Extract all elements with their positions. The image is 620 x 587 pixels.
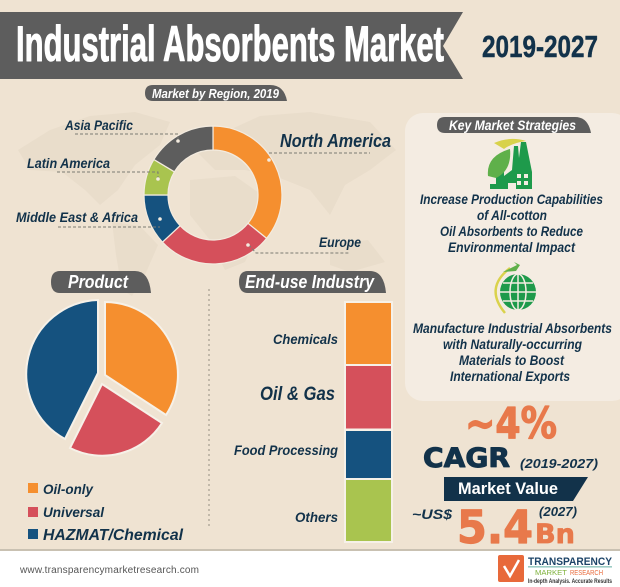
stat: market value xyxy=(412,501,577,554)
stat: market value: 5.4 xyxy=(457,501,533,554)
text: strategy two: Materials to Boost xyxy=(459,353,564,368)
pill heading: key market strategies: Key Market Strategies xyxy=(449,118,576,133)
legend: product xyxy=(28,481,184,544)
label: Europe: Europe xyxy=(319,235,361,250)
segment: Chemicals xyxy=(346,303,391,364)
segment: Others xyxy=(346,480,391,541)
stat: market value: (2027) xyxy=(539,504,577,519)
legend: product: Universal xyxy=(43,504,105,520)
segment: Oil and Gas xyxy=(346,366,391,428)
title banner xyxy=(0,12,463,79)
footer url: www.transparencymarketresearch.com xyxy=(19,565,199,576)
pill heading: market by region: Market by Region, 2019 xyxy=(152,86,280,101)
banner: market value: Market Value xyxy=(458,480,558,498)
logo: MARKET xyxy=(535,568,567,577)
pie chart: product xyxy=(26,300,178,456)
stat: CAGR label: CAGR xyxy=(423,443,510,474)
slice: Universal xyxy=(70,384,162,456)
bar labels: Oil & Gas xyxy=(260,384,335,405)
stat: market value: Bn xyxy=(535,519,575,550)
stacked bar: end-use industry xyxy=(344,301,393,543)
logo: TRANSPARENCY xyxy=(528,556,613,568)
bar labels: Chemicals xyxy=(273,331,338,347)
segment: North America xyxy=(213,126,282,238)
logo xyxy=(498,555,613,585)
donut markers xyxy=(156,139,271,247)
stat: CAGR percentage: ~4% xyxy=(465,399,557,449)
logo: RESEARCH xyxy=(570,568,603,577)
label: Latin America: Latin America xyxy=(27,156,110,171)
text: strategy two: with Naturally-occurring xyxy=(443,337,583,352)
background world map xyxy=(18,112,396,296)
segment: Middle East and Africa xyxy=(144,195,180,242)
donut leader lines xyxy=(57,134,370,253)
segment: Asia Pacific xyxy=(154,126,213,172)
segment: Latin America xyxy=(144,160,174,195)
text: strategy one: Oil Absorbents to Reduce xyxy=(440,224,583,239)
text: strategy two: International Exports xyxy=(450,369,570,384)
slice: Oil-only xyxy=(105,302,178,415)
legend: product: Oil-only xyxy=(43,481,94,497)
bar labels xyxy=(234,331,338,525)
bar labels: Others xyxy=(295,509,338,525)
slice: HAZMAT/Chemical xyxy=(26,300,98,439)
text: strategy one: Environmental Impact xyxy=(448,240,575,255)
region labels xyxy=(16,118,391,250)
banner: market value xyxy=(444,477,588,501)
logo mark xyxy=(498,555,524,582)
icon: globe with plane xyxy=(496,262,536,313)
bar labels: Food Processing xyxy=(234,442,338,458)
segment: Food Processing xyxy=(346,431,391,478)
pill heading: end-use industry: End-use Industry xyxy=(245,272,375,292)
icon: green factory with leaf xyxy=(488,139,532,189)
pill heading: product xyxy=(51,271,151,293)
text: strategy one: of All-cotton xyxy=(477,208,547,223)
segment: Europe xyxy=(162,223,267,264)
pill heading: product: Product xyxy=(68,272,129,292)
legend: product: HAZMAT/Chemical xyxy=(43,527,184,544)
label: North America: North America xyxy=(280,131,391,151)
stat: CAGR period: (2019-2027) xyxy=(520,456,598,471)
label: Asia Pacific: Asia Pacific xyxy=(64,118,133,133)
stat: market value: ~US$ xyxy=(412,506,452,522)
donut chart: market by region xyxy=(144,126,282,264)
panel: key market strategies xyxy=(405,113,620,401)
text: strategy one xyxy=(420,192,603,255)
label: Middle East and Africa: Middle East & Africa xyxy=(16,209,138,225)
text: strategy two xyxy=(413,321,612,384)
